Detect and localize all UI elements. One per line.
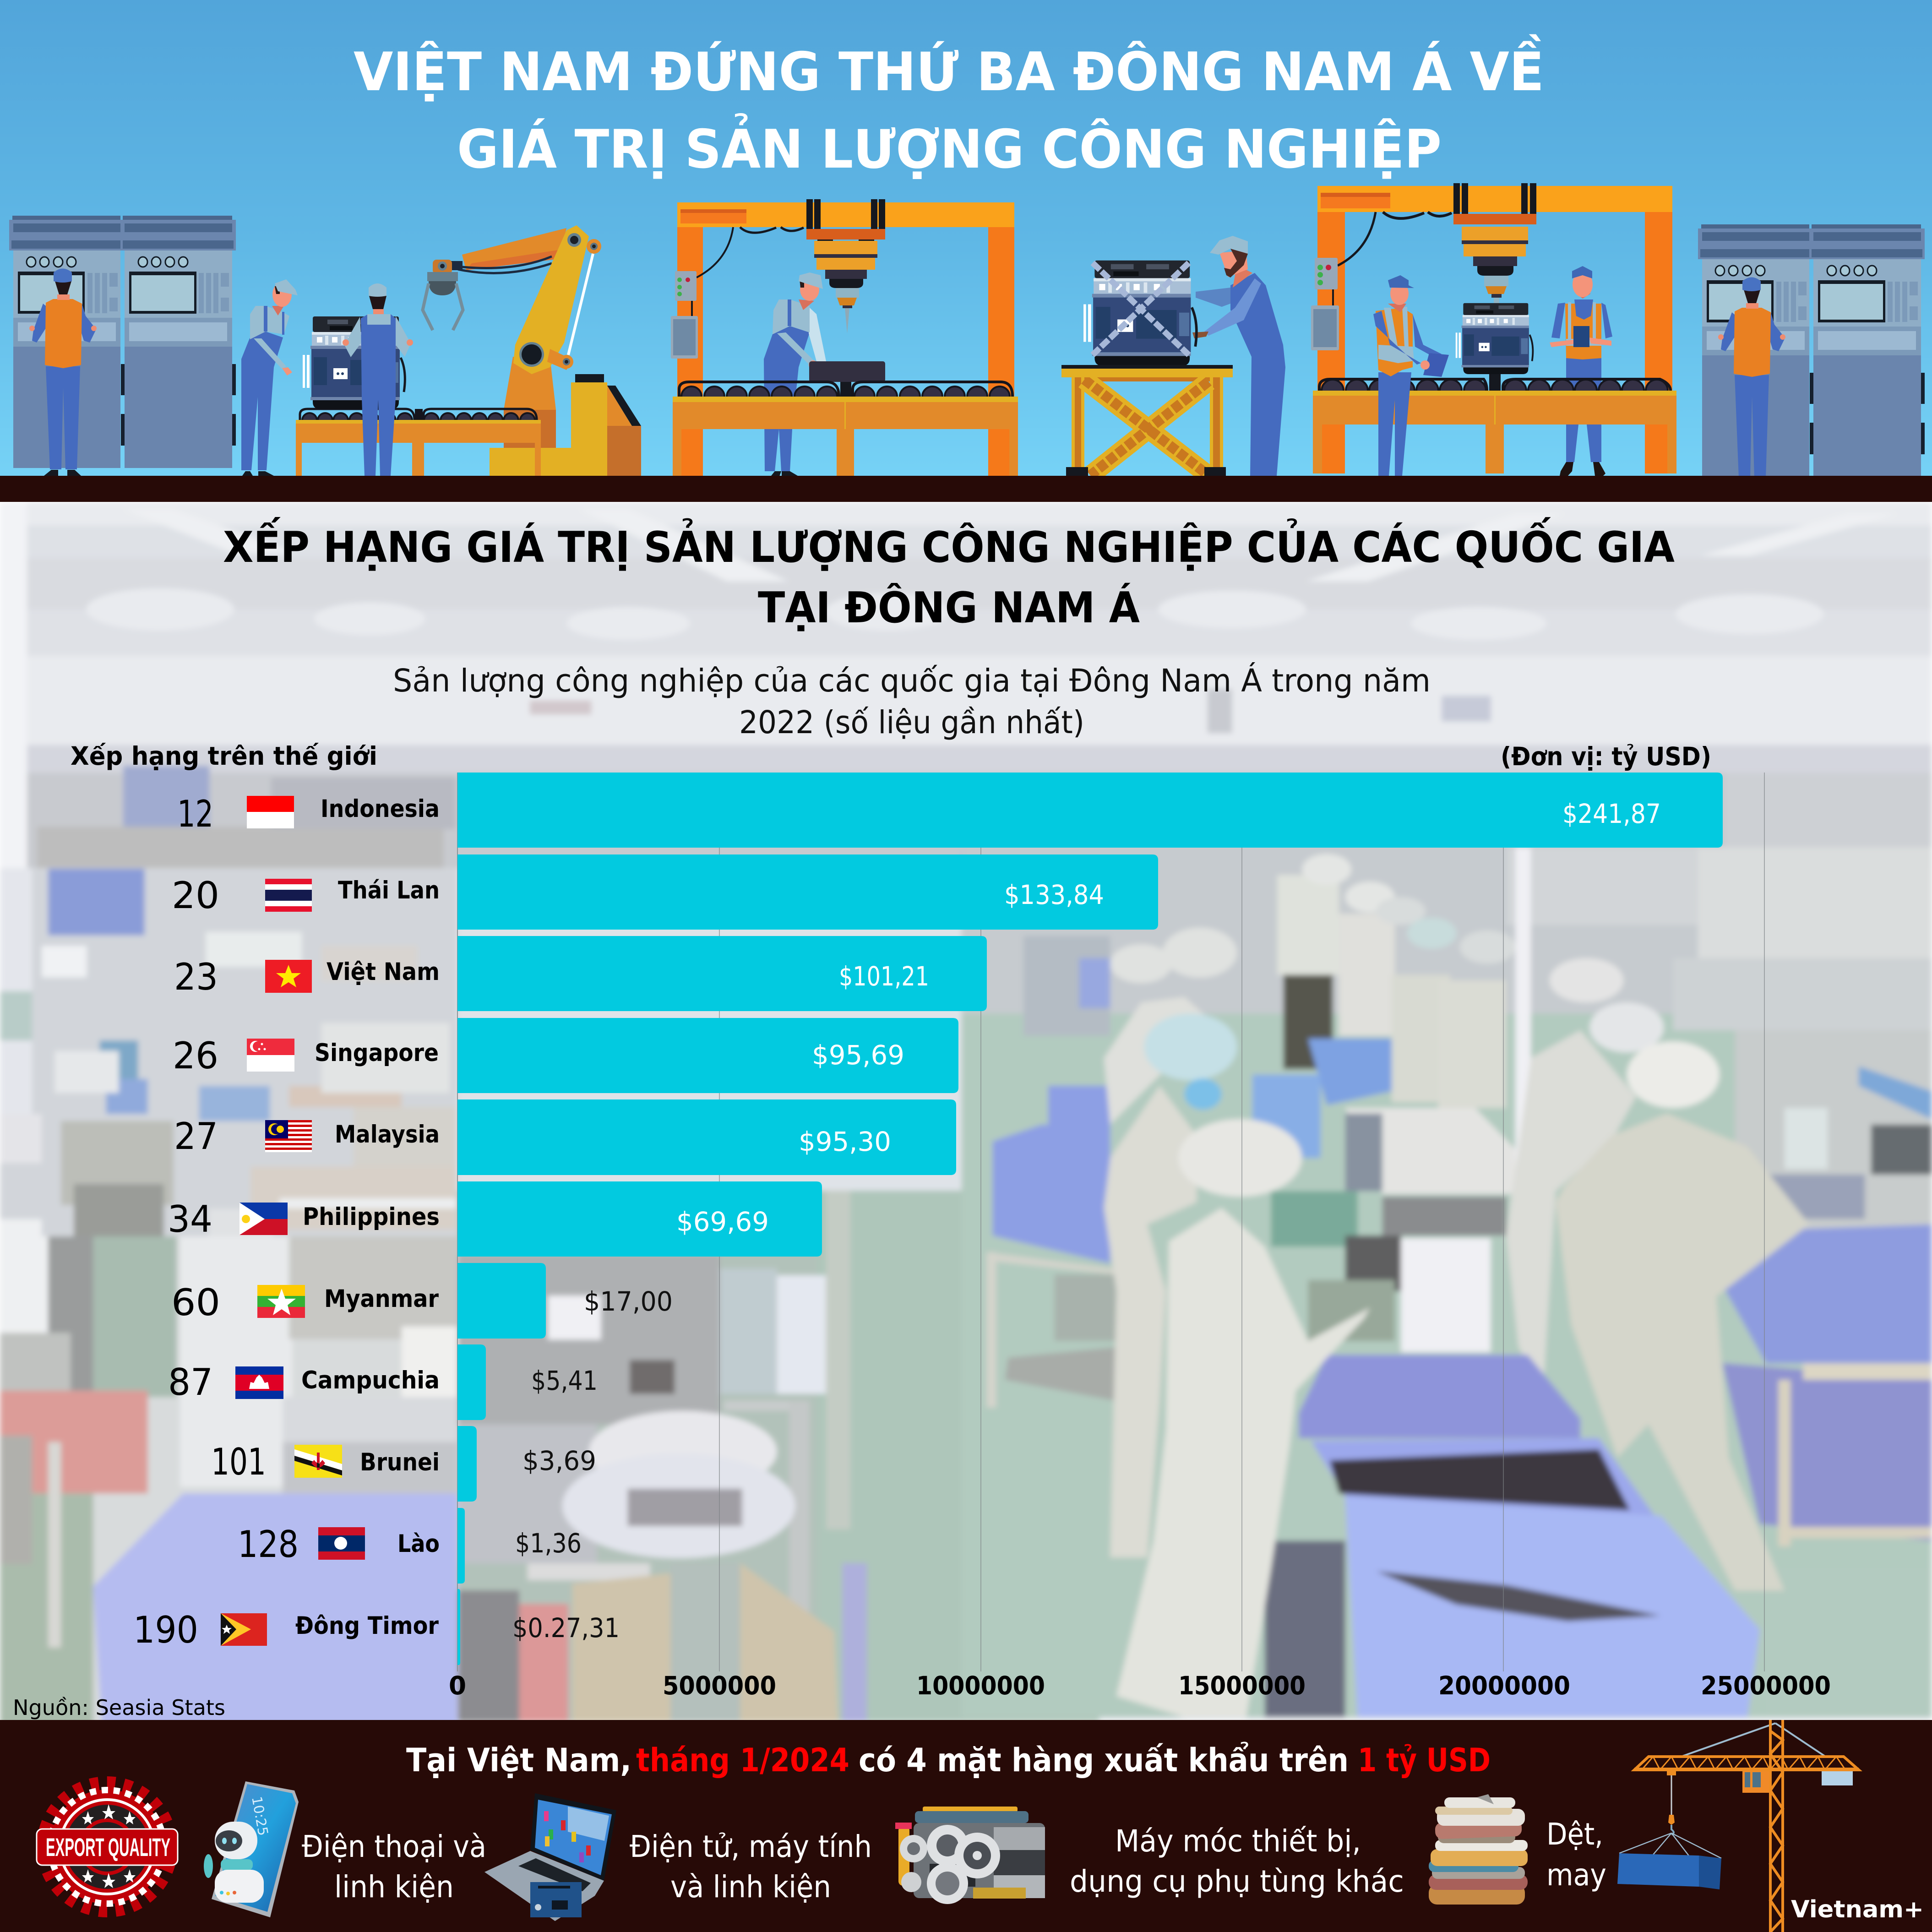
bar value labels: $0.27,31 [512, 1612, 620, 1644]
bottom dark panel [0, 1720, 1932, 1932]
flag: Laos [318, 1527, 365, 1560]
bar value labels: $69,69 [676, 1206, 769, 1237]
bottom heading: tháng 1/2024 [636, 1742, 849, 1779]
rank column heading: Xếp hạng trên thế giới [71, 741, 377, 771]
photo: central floor, dish and frame [458, 1191, 1099, 1722]
main title [354, 34, 1544, 180]
bar: Lào [457, 1508, 465, 1584]
icon: laptop with circuit board [484, 1793, 616, 1921]
axis labels: 10000000 [916, 1671, 1045, 1700]
axis labels: 5000000 [663, 1671, 776, 1700]
icon: phone with robot [204, 1781, 299, 1917]
flag: Vietnam [265, 960, 312, 993]
chart subtitle [393, 662, 1431, 741]
bar: Campuchia [457, 1344, 486, 1420]
bar value labels: $17,00 [584, 1286, 673, 1317]
label: phones: Điện thoại và [302, 1829, 486, 1864]
bottom heading [406, 1742, 1491, 1779]
axis labels [449, 1671, 1831, 1700]
icon: export quality badge [37, 1784, 178, 1910]
source note: Nguồn: Seasia Stats [13, 1695, 225, 1720]
bar: Myanmar [457, 1263, 546, 1339]
bar value labels [512, 798, 1661, 1644]
bar: Singapore [457, 1018, 958, 1093]
bottom heading: có 4 mặt hàng xuất khẩu trên [859, 1742, 1349, 1779]
world rank numbers: 190 [133, 1609, 198, 1651]
bar value labels: $101,21 [839, 961, 929, 992]
chained engine on table with bearded worker [1061, 236, 1285, 476]
bar: Thái Lan [457, 854, 1158, 930]
logo: Vietnam+: Vietnam+ [1791, 1896, 1924, 1923]
flag: Cambodia [235, 1366, 283, 1399]
unit label: (Đơn vị: tỷ USD) [1501, 742, 1711, 771]
worker at conveyor, back view [343, 283, 413, 476]
world rank numbers: 101 [211, 1441, 266, 1483]
label: electronics: và linh kiện [670, 1869, 831, 1905]
world rank numbers: 87 [168, 1361, 213, 1404]
label: phones: linh kiện [334, 1869, 454, 1905]
photo: left workers upper [0, 869, 457, 1282]
bar value labels: $95,69 [812, 1039, 904, 1071]
country names: Việt Nam [327, 958, 440, 986]
country names: Philippines [303, 1203, 440, 1231]
flag: Philippines [239, 1203, 288, 1235]
world rank numbers: 12 [177, 793, 213, 835]
worker beside engine [241, 279, 298, 476]
bar value labels: $95,30 [799, 1126, 891, 1157]
bar: Brunei [457, 1426, 477, 1502]
country names: Brunei [360, 1448, 440, 1476]
chart heading [223, 517, 1675, 632]
flag: Malaysia [265, 1120, 312, 1152]
world rank numbers [133, 793, 299, 1651]
bar value labels: $133,84 [1004, 879, 1104, 910]
bar: Indonesia [457, 773, 1723, 848]
hero machines left [9, 216, 236, 476]
flag: Thailand [265, 879, 312, 912]
label: textiles: Dệt, [1546, 1817, 1603, 1852]
world rank numbers: 27 [174, 1115, 218, 1158]
hero illustration: factory scene [0, 0, 1932, 484]
icon: stack of clothes [1429, 1794, 1528, 1905]
country names: Đông Timor [295, 1612, 439, 1640]
gantry machine 2 with workers [1311, 183, 1676, 476]
robot arm and conveyor [296, 225, 641, 476]
country names: Campuchia [301, 1366, 440, 1394]
country names [295, 795, 440, 1640]
country names: Singapore [315, 1039, 439, 1067]
bar value labels: $3,69 [522, 1445, 596, 1476]
axis labels: 20000000 [1438, 1671, 1570, 1700]
country names: Indonesia [321, 795, 440, 823]
country names: Malaysia [335, 1121, 440, 1148]
dark ground band [0, 476, 1932, 502]
icon: export quality badge: EXPORT QUALITY [46, 1833, 170, 1861]
axis labels: 25000000 [1701, 1671, 1831, 1700]
factory photo background [0, 502, 1932, 1740]
world rank numbers: 128 [238, 1523, 299, 1566]
photo: left workers lower and bins [0, 1236, 457, 1740]
world rank numbers: 34 [168, 1198, 212, 1241]
axis labels: 0 [449, 1671, 466, 1700]
label: machinery: Máy móc thiết bị, [1115, 1823, 1361, 1859]
icon: tower crane with container [1617, 1720, 1859, 1932]
icon: phone with robot: 10:25 [248, 1795, 271, 1837]
flag: Brunei [294, 1445, 342, 1478]
photo: ceiling and far factory [0, 502, 1932, 868]
photo: workers and blue bins on the right [962, 847, 1932, 1717]
label: machinery: dụng cụ phụ tùng khác [1070, 1864, 1404, 1899]
chart heading: TẠI ĐÔNG NAM Á [758, 582, 1140, 632]
bottom heading: 1 tỷ USD [1358, 1742, 1491, 1779]
main title: GIÁ TRỊ SẢN LƯỢNG CÔNG NGHIỆP [457, 113, 1442, 180]
icon: machinery engine [895, 1807, 1045, 1904]
bar value labels: $241,87 [1562, 798, 1661, 829]
label: electronics: Điện tử, máy tính [630, 1829, 872, 1864]
label: electronics [630, 1829, 872, 1905]
bar chart [457, 773, 1764, 1671]
world rank numbers: 26 [173, 1034, 218, 1077]
label: textiles [1546, 1817, 1606, 1893]
world rank numbers: 20 [172, 874, 219, 917]
hero machines right [1698, 224, 1925, 484]
chart heading: XẾP HẠNG GIÁ TRỊ SẢN LƯỢNG CÔNG NGHIỆP CỦA CÁC QUỐC GIA [223, 517, 1675, 572]
world rank numbers: 23 [174, 956, 218, 998]
label: machinery [1070, 1823, 1404, 1899]
world rank numbers: 60 [171, 1281, 220, 1324]
chart subtitle: 2022 (số liệu gần nhất) [739, 704, 1084, 741]
flag: Myanmar [257, 1285, 305, 1318]
bar: Việt Nam [457, 936, 987, 1011]
flag: Singapore [247, 1039, 294, 1072]
bar value labels: $1,36 [515, 1528, 582, 1559]
bottom heading: Tại Việt Nam, [406, 1742, 631, 1779]
country names: Lào [397, 1530, 440, 1558]
label: textiles: may [1546, 1857, 1606, 1893]
bar value labels: $5,41 [531, 1365, 598, 1396]
main title: VIỆT NAM ĐỨNG THỨ BA ĐÔNG NAM Á VỀ [354, 34, 1544, 103]
bar: Philippines [457, 1181, 822, 1257]
country names: Myanmar [324, 1285, 439, 1313]
flag: Timor-Leste [221, 1613, 267, 1646]
bar: Đông Timor [457, 1589, 460, 1665]
bar: Malaysia [457, 1099, 956, 1175]
country names: Thái Lan [338, 876, 440, 904]
flag: Indonesia [247, 796, 294, 828]
label: phones [302, 1829, 486, 1905]
chart subtitle: Sản lượng công nghiệp của các quốc gia tại Đông Nam Á trong năm [393, 662, 1431, 699]
axis labels: 15000000 [1178, 1671, 1306, 1700]
gantry machine 1 with worker [671, 199, 1018, 479]
